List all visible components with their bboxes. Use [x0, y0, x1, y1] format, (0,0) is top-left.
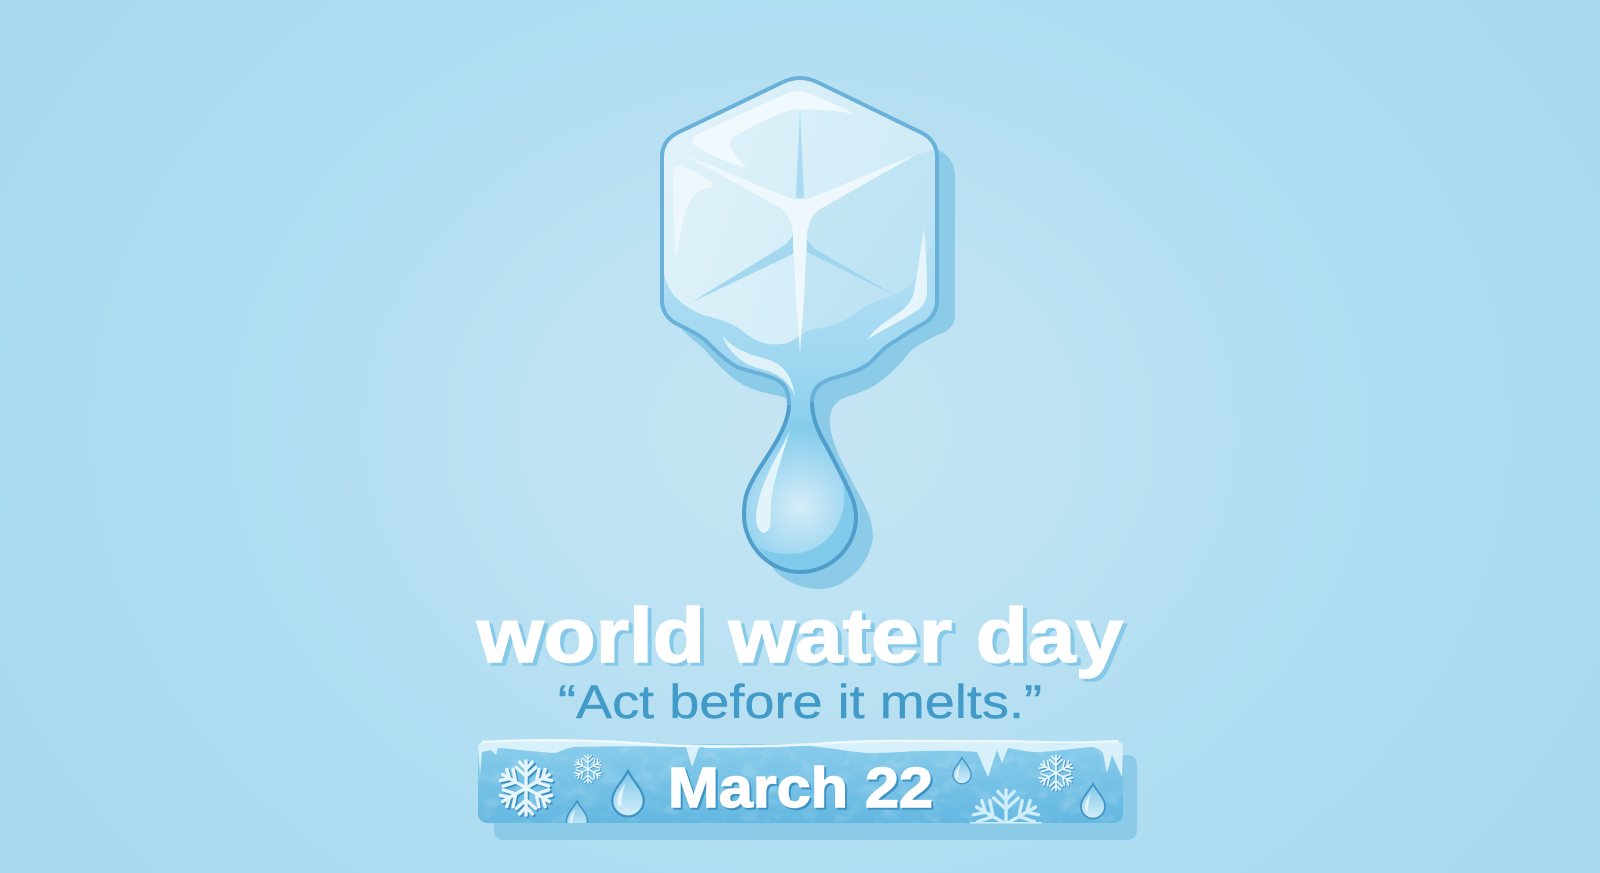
melt highlight — [722, 335, 795, 397]
drop icon 1 — [612, 771, 644, 816]
lower right facet line — [807, 240, 898, 297]
icon: melting ice cube with water drop — [662, 78, 955, 589]
drop icon clipped bottom — [566, 800, 588, 823]
cube outline — [783, 78, 937, 402]
white Y edge highlight — [683, 154, 917, 352]
snowflake bottom half — [972, 788, 1040, 822]
drop outline — [744, 402, 856, 572]
water drop fill — [744, 420, 856, 572]
banner body — [478, 744, 1123, 823]
title: world water day — [476, 593, 1123, 679]
snowflake small left — [573, 755, 603, 784]
snowflake right — [1038, 756, 1075, 791]
ice texture — [478, 744, 1123, 823]
drop lower crescent — [759, 483, 856, 572]
melt water — [662, 233, 937, 440]
left highlight — [673, 166, 713, 257]
ground line under half flake — [970, 822, 1042, 824]
right highlight — [868, 228, 927, 339]
title: world water day — [480, 596, 1127, 682]
banner shadow — [494, 755, 1137, 840]
lower left facet line — [692, 235, 793, 302]
cube top blue spike — [796, 110, 804, 198]
drop highlight — [756, 430, 790, 533]
cube and drop shadow — [682, 147, 955, 589]
snowflake left large — [498, 761, 556, 817]
date banner — [478, 739, 1137, 840]
drop icon 3 — [1081, 784, 1105, 819]
date text: March 22 — [668, 756, 933, 820]
drop icon 2 — [953, 758, 971, 784]
top highlight — [692, 91, 855, 168]
ice cube body — [662, 78, 937, 572]
tagline: “Act before it melts.” — [558, 675, 1042, 728]
date text: March 22 — [670, 758, 935, 822]
cube right face — [800, 150, 935, 345]
snow cap with icicles — [478, 740, 1123, 777]
snow cap top highlight — [482, 740, 1118, 746]
